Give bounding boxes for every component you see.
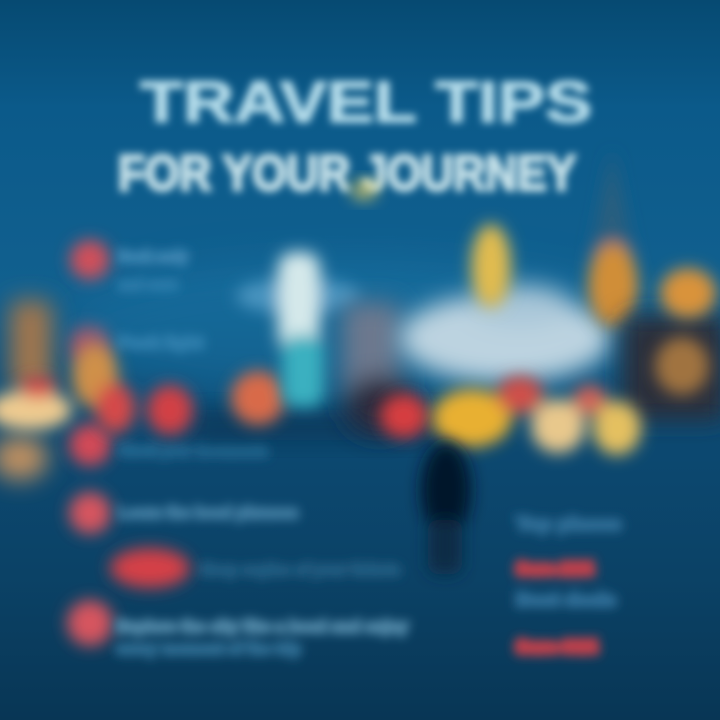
skyline glow — [60, 260, 660, 400]
marker 1 — [70, 240, 110, 280]
red badge — [110, 548, 190, 588]
tip 4: Learn the local phrases — [118, 503, 298, 522]
marker 3 — [69, 424, 111, 466]
left lights — [0, 344, 285, 435]
tip 6: Explore the city like a local and enjoy — [116, 617, 409, 636]
right note 2: Best deals — [516, 590, 616, 610]
grey tower — [342, 302, 416, 435]
subtitle line two: FOR YOUR JOURNEY — [118, 145, 576, 201]
tip 1: Book early — [118, 247, 188, 266]
left tower — [0, 300, 52, 480]
right label 2: Save 30% — [516, 637, 598, 657]
red light — [380, 394, 428, 438]
tip 3: Check your documents — [118, 441, 268, 460]
horizon shadow — [190, 410, 450, 440]
left bullet markers — [67, 240, 113, 646]
title line one: TRAVEL TIPS — [140, 70, 592, 135]
tip 6 detail: every moment of the trip — [116, 639, 301, 658]
central white tower — [236, 252, 360, 407]
right lights — [655, 268, 716, 395]
tip 5: Keep copies of your tickets — [200, 560, 400, 579]
right label 1: Save 20% — [516, 559, 594, 579]
street lights — [432, 376, 641, 455]
white dome — [399, 285, 611, 382]
skyline — [0, 150, 720, 480]
title accent — [351, 180, 377, 200]
right note 1: Top places — [516, 514, 621, 534]
marker 5 — [67, 600, 113, 646]
tip 2: Pack light — [118, 333, 203, 352]
traveller silhouette — [421, 442, 471, 574]
golden dome — [471, 224, 511, 308]
left text blocks — [116, 247, 409, 658]
marker 2 — [70, 325, 110, 365]
right text blocks — [516, 514, 621, 657]
tip 1 detail: and save — [118, 275, 178, 294]
spire — [588, 150, 638, 327]
right dark building — [622, 315, 720, 420]
marker 4 — [69, 492, 111, 534]
